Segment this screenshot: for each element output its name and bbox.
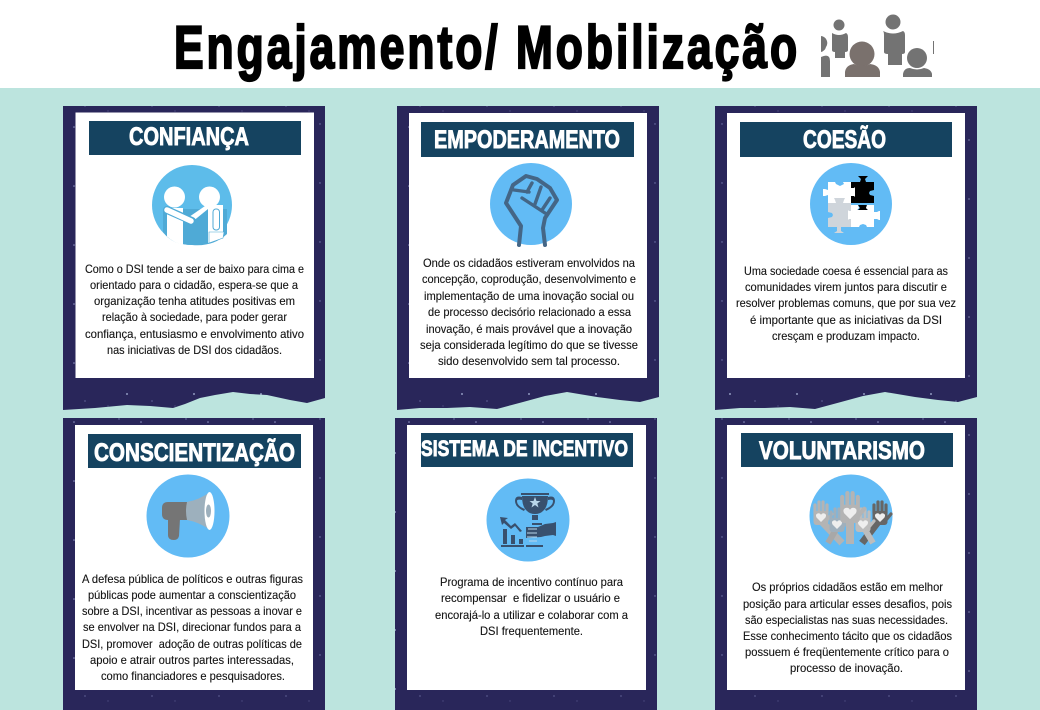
text block: posição para articular esses desafios, pois xyxy=(743,598,952,611)
text block: confiança, entusiasmo e envolvimento ativo xyxy=(85,328,304,341)
text block: Programa de incentivo contínuo para xyxy=(440,576,624,589)
panel card xyxy=(76,112,314,378)
text block: processo de inovação. xyxy=(790,662,903,675)
text block: comunidades virem juntos para discutir e xyxy=(745,281,947,294)
text block: concepção, coprodução, desenvolvimento e xyxy=(422,273,636,286)
panel card xyxy=(409,113,647,378)
text block: resolver problemas comuns, que por sua vez xyxy=(736,297,956,310)
panel background xyxy=(397,106,659,410)
text block: orientado para o cidadão, espera-se que a xyxy=(90,279,299,292)
icon: raised hands xyxy=(810,474,892,558)
icon: megaphone xyxy=(146,474,230,558)
text block: A defesa pública de políticos e outras figuras xyxy=(82,573,303,586)
text block xyxy=(435,576,629,638)
hand: far left xyxy=(814,502,842,543)
text block: sido desenvolvido sem tal processo. xyxy=(438,355,620,368)
text block: possuem é freqüentemente crítico para o xyxy=(745,646,949,659)
heading bar xyxy=(88,434,301,468)
heading bar xyxy=(89,121,301,155)
text block: DSI, promover adoção de outras políticas de xyxy=(82,638,302,651)
panel background xyxy=(715,418,977,710)
hand: right dark xyxy=(862,502,891,543)
text block xyxy=(85,263,304,357)
hand: center xyxy=(840,493,864,544)
text block: DSI frequentemente. xyxy=(480,625,583,638)
text block xyxy=(82,573,303,683)
heading: EMPODERAMENTO xyxy=(434,126,620,154)
text block xyxy=(736,265,956,343)
text block: organização tenha atitudes positivas em xyxy=(94,295,295,308)
text block: se envolver na DSI, direcionar fundos para a xyxy=(83,621,302,634)
icon: trophy and chart xyxy=(486,478,570,562)
text block: nas iniciativas de DSI dos cidadãos. xyxy=(107,344,282,357)
icon: puzzle xyxy=(810,163,892,245)
heading bar xyxy=(421,433,633,467)
text block: Como o DSI tende a ser de baixo para cima e xyxy=(85,263,304,276)
text block: implementação de uma inovação social ou xyxy=(424,290,634,303)
hand: second xyxy=(828,509,848,543)
heading: CONSCIENTIZAÇÃO xyxy=(94,437,295,467)
panel: sistema de incentivo xyxy=(395,418,657,710)
text block: públicas pode aumentar a conscientização xyxy=(88,589,296,602)
panel background xyxy=(395,418,657,710)
icon: group of people xyxy=(821,14,934,77)
panel: coesão xyxy=(715,106,977,410)
puzzle piece: top right xyxy=(851,176,874,210)
text block xyxy=(420,257,638,368)
text block: apoio e atrair outros partes interessadas, xyxy=(90,654,294,667)
icon: raised fist xyxy=(490,163,572,245)
heading: COESÃO xyxy=(803,124,886,154)
heading bar xyxy=(740,122,952,157)
panel: confiança xyxy=(63,106,325,410)
text block: Uma sociedade coesa é essencial para as xyxy=(744,265,948,278)
text block: Onde os cidadãos estiveram envolvidos na xyxy=(423,257,636,270)
text block: recompensar e fidelizar o usuário e xyxy=(441,592,620,605)
panel card xyxy=(727,425,965,690)
text block xyxy=(743,581,952,675)
text block: é importante que as iniciativas da DSI xyxy=(750,314,942,327)
heading: VOLUNTARISMO xyxy=(759,437,925,465)
panel card xyxy=(75,425,313,690)
text block: sobre a DSI, incentivar as pessoas a inovar e xyxy=(82,605,302,618)
text block: são especialistas nas suas necessidades. xyxy=(745,614,948,627)
text block: seja considerada legítimo do que se tivesse xyxy=(420,339,638,352)
text block: inovação, é mais provável que a inovação xyxy=(426,323,632,336)
hand: fourth xyxy=(856,509,874,543)
text block: de processo decisório relacionado a essa xyxy=(428,306,632,319)
heading: CONFIANÇA xyxy=(129,123,249,151)
panel background xyxy=(715,106,977,410)
panel card xyxy=(727,113,965,378)
text block: Esse conhecimento tácito que os cidadãos xyxy=(743,630,952,643)
panel: voluntarismo xyxy=(715,418,977,710)
panel card xyxy=(407,425,646,690)
panel background xyxy=(63,106,325,410)
puzzle piece: bottom right xyxy=(848,205,880,227)
icon: handshake xyxy=(152,165,232,245)
panel background xyxy=(63,418,325,710)
heading: SISTEMA DE INCENTIVO xyxy=(421,436,628,461)
text block: cresçam e produzam impacto. xyxy=(772,330,920,343)
puzzle piece: bottom left xyxy=(828,198,851,233)
heading bar xyxy=(741,433,953,467)
text block: relação à sociedade, para poder gerar xyxy=(102,311,287,324)
heading bar xyxy=(421,122,634,157)
title: Engajamento/ Mobilização xyxy=(174,15,797,82)
puzzle piece: top left xyxy=(823,182,855,204)
text block: Os próprios cidadãos estão em melhor xyxy=(752,581,943,594)
text block: encorajá-lo a utilizar e colaborar com a xyxy=(435,609,629,622)
text block: como financiadores e pesquisadores. xyxy=(101,670,285,683)
panel: conscientização xyxy=(63,418,325,710)
panel: empoderamento xyxy=(397,106,659,410)
